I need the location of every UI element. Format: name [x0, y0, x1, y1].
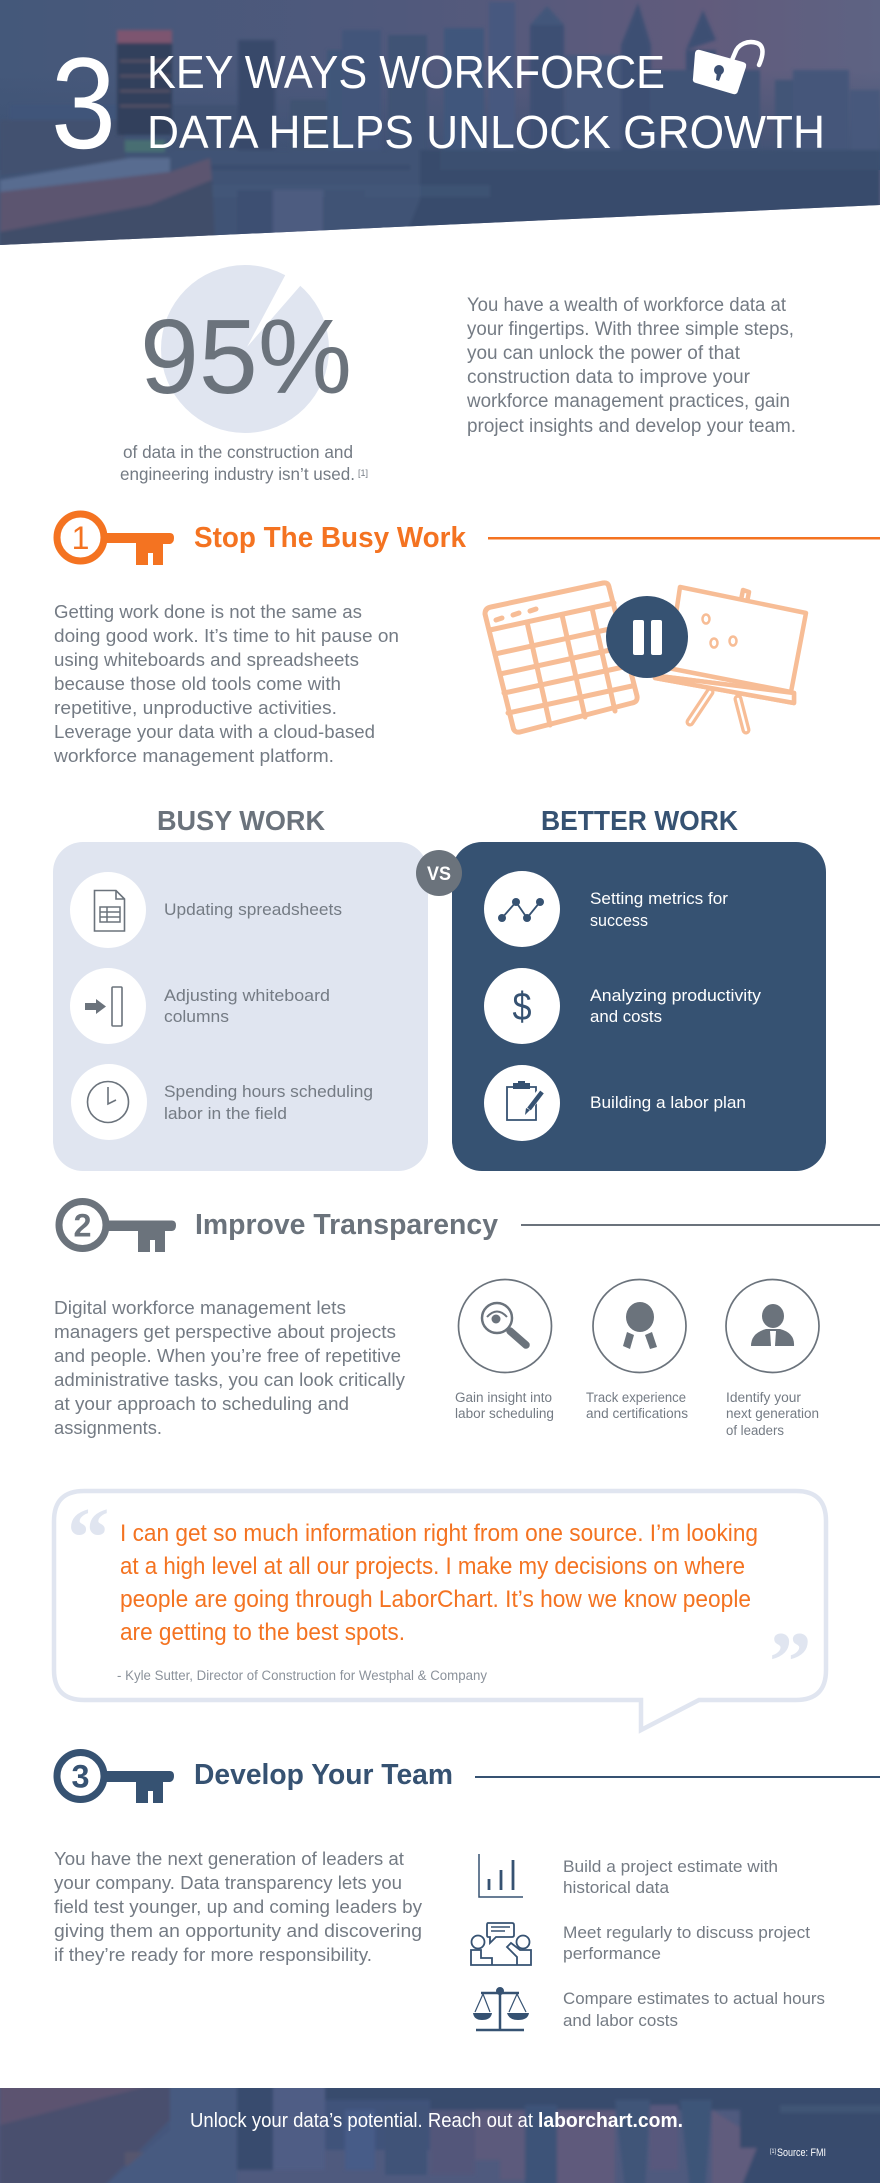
section 2 paragraph: and people. When you’re free of repetitive: [54, 1345, 401, 1366]
row: spending hours scheduling: labor in the field: [164, 1104, 287, 1123]
header banner: [0, 0, 880, 250]
benefit: identify leaders: Identify your: [726, 1390, 802, 1405]
call to action: laborchart.com.: [538, 2110, 683, 2132]
red-topped tower: [117, 30, 172, 135]
action: build estimate: historical data: [563, 1878, 670, 1897]
section 3 heading: [57, 1752, 880, 1803]
heading: busy work: BUSY WORK: [157, 805, 325, 836]
heading text: Stop The Busy Work: [194, 522, 467, 554]
action: compare estimates: [473, 1988, 825, 2030]
intro paragraph: your fingertips. With three simple steps,: [467, 319, 794, 340]
icon: person with tie: [751, 1304, 794, 1346]
source note: Source: FMI: [777, 2147, 826, 2159]
action: compare estimates: and labor costs: [563, 2011, 678, 2030]
panel: busy work: [53, 842, 428, 1171]
icon: orange key 1: 1: [72, 520, 89, 556]
section 3 paragraph: giving them an opportunity and discovering: [54, 1920, 422, 1941]
benefit: identify leaders: of leaders: [726, 1423, 784, 1438]
section 2 paragraph: Digital workforce management lets: [54, 1297, 346, 1318]
benefit: track experience: Track experience: [586, 1390, 686, 1405]
row: building a labor plan: Building a labor plan: [590, 1093, 746, 1112]
icon: meeting with speech bubble: [471, 1923, 531, 1965]
icon: magnifying glass with eye: [482, 1303, 526, 1345]
row: building a labor plan: [484, 1065, 746, 1141]
row: setting metrics: [484, 871, 728, 947]
row: analyzing productivity: Analyzing productivity: [590, 986, 762, 1005]
section 2 heading: [59, 1202, 880, 1252]
icon: spreadsheet: [485, 583, 637, 732]
panel: better work: [452, 842, 826, 1171]
quote text: people are going through LaborChart. It’s how we know people: [120, 1586, 751, 1613]
icon: navy key 3: [57, 1752, 174, 1803]
section 3 paragraph: You have the next generation of leaders at: [54, 1848, 404, 1869]
section 2 paragraph: assignments.: [54, 1417, 162, 1438]
intro paragraph: [466, 295, 796, 437]
section 2 paragraph: at your approach to scheduling and: [54, 1393, 349, 1414]
stat caption: [1]: [358, 468, 368, 478]
icon: grey key 2: 2: [74, 1208, 92, 1244]
row: spending hours scheduling: [71, 1064, 373, 1140]
speech bubble: [54, 1491, 826, 1730]
row: updating spreadsheets: [70, 872, 342, 948]
benefit: track experience: [586, 1280, 688, 1421]
title: [147, 46, 825, 158]
action: meet regularly: performance: [563, 1944, 661, 1963]
quote text: [120, 1520, 758, 1646]
icon: whiteboard on easel: [655, 587, 806, 730]
illustration: spreadsheet and whiteboard paused: [485, 583, 806, 732]
row: setting metrics: success: [590, 911, 648, 930]
heading text: Develop Your Team: [194, 1759, 453, 1791]
section 1 paragraph: doing good work. It’s time to hit pause on: [54, 625, 399, 646]
action: compare estimates: Compare estimates to actual hours: [563, 1989, 825, 2008]
big numeral 3: 3: [51, 30, 116, 176]
title: KEY WAYS WORKFORCE: [147, 46, 665, 98]
icon: pause button: [606, 596, 688, 678]
icon: award ribbon: [623, 1302, 657, 1349]
header skyline photo: [0, 0, 880, 250]
section 3 paragraph: [54, 1848, 423, 1965]
section 3 paragraph: field test younger, up and coming leaders by: [54, 1896, 423, 1917]
section 2 paragraph: managers get perspective about projects: [54, 1321, 396, 1342]
opening quote mark: “: [67, 1491, 110, 1585]
call to action: Unlock your data’s potential. Reach out at: [190, 2110, 533, 2132]
row: adjusting whiteboard columns: [70, 968, 330, 1044]
heading text: Improve Transparency: [195, 1209, 498, 1241]
quote text: are getting to the best spots.: [120, 1619, 405, 1646]
section 3 paragraph: your company. Data transparency lets you: [54, 1872, 402, 1893]
row: spending hours scheduling: Spending hours scheduling: [164, 1082, 373, 1101]
benefit: identify leaders: next generation: [726, 1406, 819, 1421]
source note: [1]: [770, 2149, 776, 2155]
row: analyzing productivity: [484, 968, 762, 1044]
VS badge: VS: [427, 864, 451, 885]
intro paragraph: workforce management practices, gain: [466, 391, 790, 412]
section 1 paragraph: repetitive, unproductive activities.: [54, 697, 337, 718]
icon: navy key 3: 3: [72, 1758, 90, 1794]
row: adjusting whiteboard columns: Adjusting whiteboard: [164, 986, 330, 1005]
callout: customer quote: [54, 1491, 826, 1730]
95% figure: 95%: [140, 298, 352, 416]
section 1 paragraph: Leverage your data with a cloud-based: [54, 721, 375, 742]
row: updating spreadsheets: Updating spreadsheets: [164, 900, 342, 919]
icon: bar chart: [479, 1854, 523, 1897]
stat caption: [120, 442, 368, 484]
quote text: I can get so much information right from one source. I’m looking: [120, 1520, 758, 1547]
stat: 95 percent: [120, 262, 368, 484]
icon: open padlock: [693, 42, 762, 94]
footer reflection photo: [0, 2083, 880, 2183]
title: DATA HELPS UNLOCK GROWTH: [147, 106, 825, 158]
quote text: at a high level at all our projects. I make my decisions on where: [120, 1553, 745, 1580]
intro paragraph: you can unlock the power of that: [467, 343, 741, 364]
icon: orange key 1: [57, 514, 174, 565]
section 2 paragraph: [54, 1297, 406, 1438]
stat caption: engineering industry isn’t used.: [120, 464, 355, 484]
row: adjusting whiteboard columns: columns: [164, 1007, 229, 1026]
closing quote mark: ”: [769, 1615, 812, 1709]
benefit: gain insight: [455, 1280, 554, 1421]
action: build estimate: [479, 1854, 778, 1897]
section 1 paragraph: because those old tools come with: [54, 673, 341, 694]
section 1 paragraph: workforce management platform.: [53, 745, 334, 766]
section 1 paragraph: using whiteboards and spreadsheets: [54, 649, 359, 670]
intro paragraph: You have a wealth of workforce data at: [467, 295, 787, 316]
heading: better work: BETTER WORK: [541, 805, 738, 836]
icon: balance scales: [473, 1988, 529, 2030]
row: analyzing productivity: and costs: [590, 1007, 662, 1026]
section 1 paragraph: [53, 601, 399, 766]
intro paragraph: construction data to improve your: [467, 367, 751, 388]
action: build estimate: Build a project estimate with: [563, 1857, 778, 1876]
comparison: busy work vs better work: [53, 805, 826, 1171]
section 2 paragraph: administrative tasks, you can look critically: [54, 1369, 406, 1390]
footer banner: [0, 2083, 880, 2183]
stat caption: of data in the construction and: [123, 442, 353, 462]
VS badge: [416, 850, 462, 896]
row: setting metrics: Setting metrics for: [590, 889, 728, 908]
attribution: - Kyle Sutter, Director of Construction for Westphal & Company: [117, 1668, 487, 1683]
benefit: track experience: and certifications: [586, 1406, 688, 1421]
pie chart circle: [161, 262, 329, 433]
action: meet regularly: Meet regularly to discuss project: [563, 1923, 810, 1942]
section 1 heading: [57, 514, 880, 565]
benefit: identify leaders: [726, 1280, 819, 1438]
action: meet regularly: [471, 1923, 810, 1965]
icon: grey key 2: [59, 1202, 176, 1252]
row: analyzing productivity: $: [512, 985, 532, 1029]
benefit: gain insight: labor scheduling: [455, 1406, 554, 1421]
benefit: gain insight: Gain insight into: [455, 1390, 552, 1405]
section 1 paragraph: Getting work done is not the same as: [54, 601, 362, 622]
section 3 paragraph: if they’re ready for more responsibility.: [54, 1944, 372, 1965]
intro paragraph: project insights and develop your team.: [467, 416, 796, 437]
